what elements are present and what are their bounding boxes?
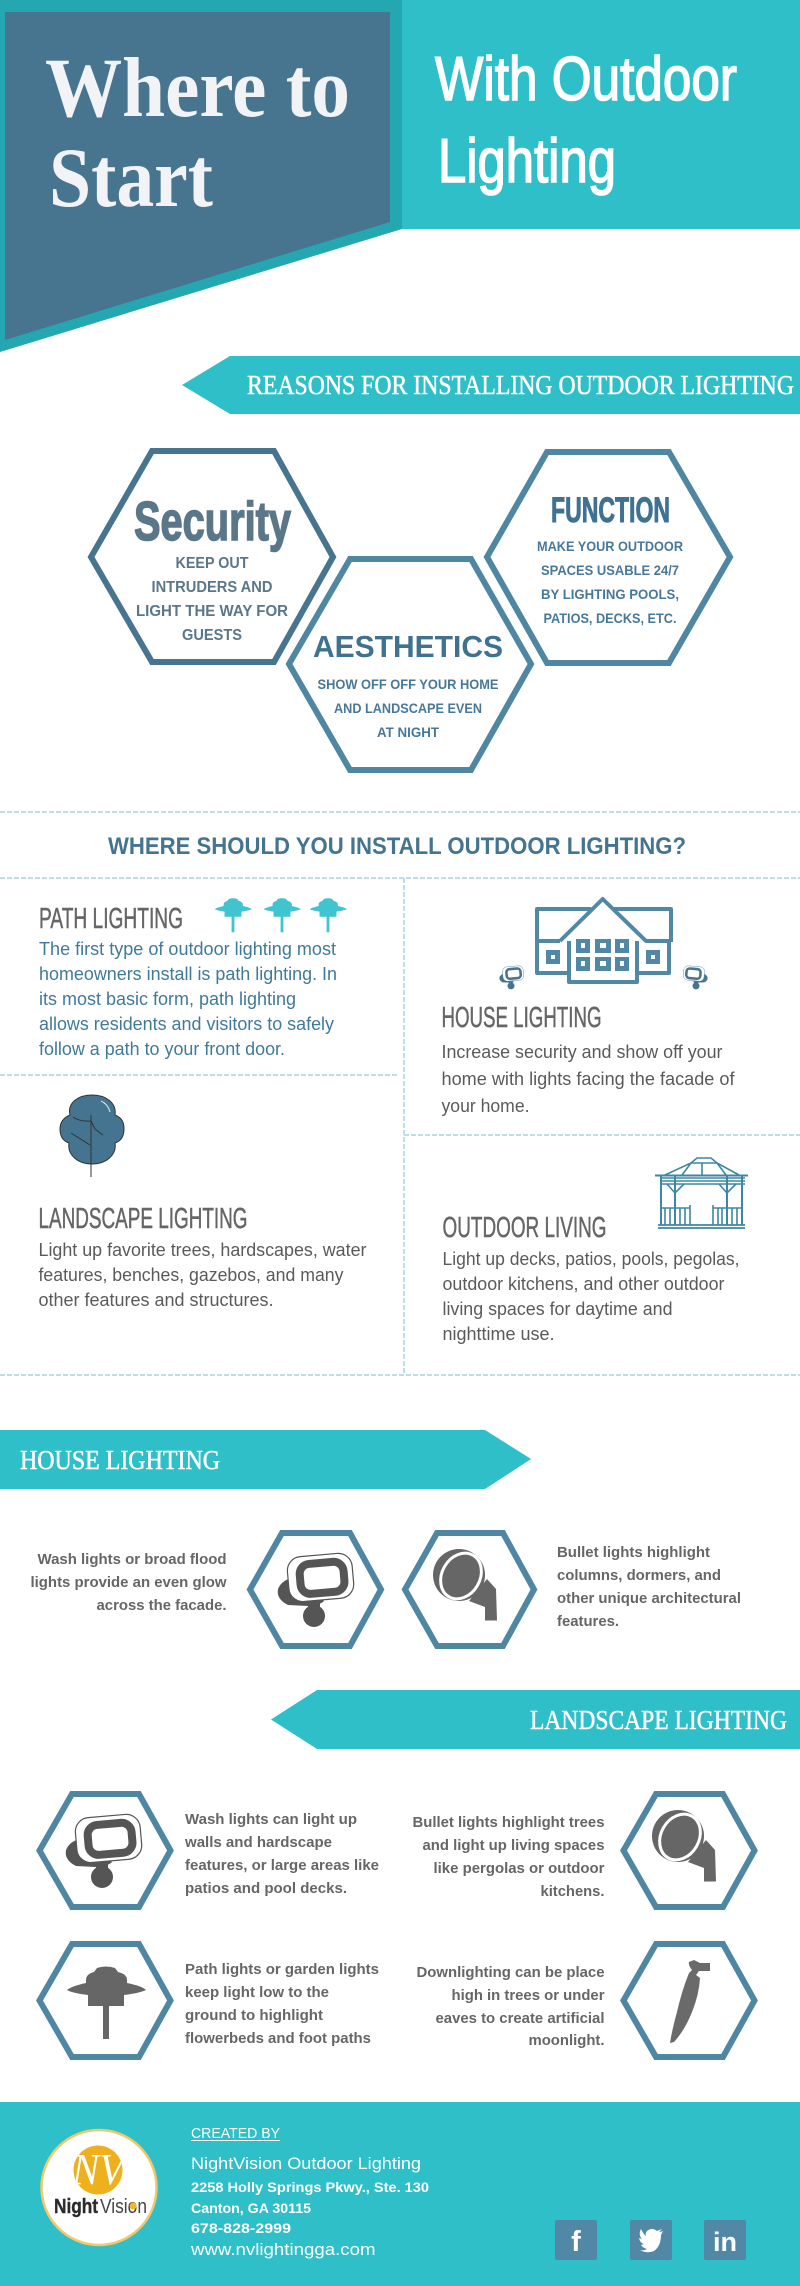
panel: house lighting: HOUSE LIGHTING — [442, 1002, 602, 1034]
panel: aesthetics hexagon: AESTHETICS — [313, 629, 503, 664]
panel: security hexagon: LIGHT THE WAY FOR — [136, 603, 288, 620]
contact details: www.nvlightingga.com — [190, 2240, 376, 2259]
text: path lights: ground to highlight — [185, 2007, 323, 2024]
text: wash lights (landscape): Wash lights can light up — [185, 1811, 357, 1828]
panel: landscape lighting: Light up favorite trees, hardscapes, water — [38, 1240, 366, 1260]
panel: aesthetics hexagon: AND LANDSCAPE EVEN — [334, 700, 482, 716]
panel: outdoor living: living spaces for daytime and — [442, 1299, 672, 1319]
panel: outdoor living: nighttime use. — [442, 1324, 554, 1344]
icon: tree — [60, 1095, 124, 1177]
text: bullet lights (house): other unique architectural — [557, 1590, 741, 1607]
panel: outdoor living: Light up decks, patios, pools, pegolas, — [442, 1249, 740, 1269]
title: Where to Start: Where to — [45, 41, 350, 135]
text: path lights — [185, 1961, 379, 2047]
icon: wash light hexagon (landscape) — [40, 1794, 170, 1907]
panel: function hexagon: FUNCTION — [551, 491, 670, 530]
panel: outdoor living — [442, 1158, 748, 1344]
text: bullet lights (landscape): and light up living spaces — [422, 1837, 604, 1854]
header band — [0, 0, 800, 352]
text: wash lights (house) — [30, 1551, 227, 1614]
text: bullet lights (house): Bullet lights highlight — [557, 1544, 710, 1561]
icon: facebook: f — [571, 2226, 581, 2258]
text: downlighting — [416, 1964, 605, 2049]
panel: security hexagon: KEEP OUT — [176, 555, 249, 572]
icon: twitter — [630, 2220, 672, 2260]
panel: security hexagon: INTRUDERS AND — [152, 579, 272, 596]
icon: bullet light hexagon (house) — [405, 1533, 534, 1646]
text: downlighting: Downlighting can be place — [416, 1964, 604, 1981]
panel: landscape lighting: features, benches, gazebos, and many — [38, 1265, 344, 1285]
panel: security hexagon: GUESTS — [182, 627, 242, 644]
panel: house lighting: home with lights facing the facade of — [442, 1069, 735, 1089]
subtitle: With Outdoor Lighting: With Outdoor — [435, 45, 737, 114]
text: bullet lights (house) — [557, 1544, 741, 1630]
text: path lights: Path lights or garden lights — [185, 1961, 379, 1978]
panel: function hexagon: MAKE YOUR OUTDOOR — [537, 538, 683, 554]
panel: function hexagon: PATIOS, DECKS, ETC. — [544, 610, 676, 626]
panel: path lighting: homeowners install is path lighting. In — [39, 964, 337, 984]
banner: house lighting: HOUSE LIGHTING — [20, 1445, 220, 1475]
icon: wash light hexagon (house) — [250, 1533, 381, 1646]
panel: security hexagon: Security — [134, 490, 291, 552]
text: wash lights (house): Wash lights or broad flood — [38, 1551, 226, 1568]
contact details: NightVision Outdoor Lighting — [191, 2154, 421, 2173]
heading: where should you install: WHERE SHOULD YOU INSTALL OUTDOOR LIGHTING? — [108, 833, 686, 860]
icon: left small wash light — [499, 965, 524, 989]
panel: function hexagon: BY LIGHTING POOLS, — [541, 586, 679, 602]
text: bullet lights (landscape): kitchens. — [540, 1883, 604, 1900]
text: wash lights (landscape): walls and hardscape — [184, 1834, 332, 1851]
icon: gazebo — [655, 1158, 748, 1228]
text: wash lights (house): lights provide an even glow — [30, 1574, 227, 1591]
text: downlighting: eaves to create artificial — [436, 2010, 604, 2027]
panel: function hexagon — [487, 452, 730, 663]
panel: aesthetics hexagon — [289, 559, 531, 770]
panel: aesthetics hexagon: SHOW OFF OFF YOUR HOME — [318, 676, 498, 692]
icon: three path lights — [215, 898, 347, 932]
logo: NightVision: NV — [71, 2145, 129, 2194]
panel: outdoor living: outdoor kitchens, and other outdoor — [442, 1274, 724, 1294]
icon: right small wash light — [683, 965, 708, 989]
contact details — [190, 2125, 429, 2259]
banner: reasons for installing outdoor lighting — [182, 356, 800, 414]
text: path lights: keep light low to the — [185, 1984, 329, 2001]
footer — [0, 2102, 800, 2286]
panel: path lighting — [39, 898, 347, 1059]
title: Where to Start — [45, 41, 350, 225]
text: wash lights (landscape): features, or large areas like — [185, 1857, 379, 1874]
panel: house lighting — [442, 899, 735, 1116]
panel: house lighting: Increase security and show off your — [442, 1042, 722, 1062]
panel: landscape lighting — [38, 1095, 366, 1310]
text: wash lights (landscape): patios and pool decks. — [185, 1880, 347, 1897]
text: bullet lights (landscape): Bullet lights highlight trees — [412, 1814, 604, 1831]
contact details: 2258 Holly Springs Pkwy., Ste. 130 — [191, 2179, 429, 2195]
subtitle: With Outdoor Lighting — [435, 45, 737, 196]
text: wash lights (landscape) — [184, 1811, 379, 1897]
text: wash lights (house): across the facade. — [96, 1597, 226, 1614]
banner: landscape lighting — [271, 1690, 800, 1749]
icon: house — [537, 899, 671, 982]
text: downlighting: moonlight. — [528, 2032, 604, 2049]
panel: path lighting: follow a path to your front door. — [39, 1039, 285, 1059]
banner: house lighting — [0, 1430, 531, 1489]
panel: landscape lighting: other features and structures. — [38, 1290, 274, 1310]
panel: landscape lighting: LANDSCAPE LIGHTING — [38, 1203, 248, 1235]
panel: house lighting: your home. — [442, 1096, 530, 1116]
logo: NightVision — [42, 2130, 156, 2245]
icon: linkedin: in — [713, 2227, 737, 2257]
icon: bullet light hexagon (landscape) — [624, 1794, 754, 1907]
title: Where to Start: Start — [49, 131, 213, 225]
text: downlighting: high in trees or under — [452, 1987, 605, 2004]
icon: facebook — [555, 2220, 597, 2260]
panel: aesthetics hexagon: AT NIGHT — [377, 724, 439, 740]
text: bullet lights (landscape) — [412, 1814, 605, 1900]
panel: path lighting: its most basic form, path lighting — [39, 989, 296, 1009]
panel: security hexagon — [91, 451, 333, 662]
text: bullet lights (house): features. — [557, 1613, 619, 1630]
panel: function hexagon: SPACES USABLE 24/7 — [541, 562, 679, 578]
panel: path lighting: PATH LIGHTING — [39, 903, 183, 935]
text: bullet lights (landscape): like pergolas or outdoor — [434, 1860, 605, 1877]
text: bullet lights (house): columns, dormers, and — [557, 1567, 721, 1584]
icon: downlight hexagon — [624, 1944, 754, 2057]
logo: NightVision: Vision — [100, 2196, 147, 2218]
contact details: Canton, GA 30115 — [191, 2200, 311, 2216]
panel: path lighting: The first type of outdoor lighting most — [39, 939, 336, 959]
contact details: 678-828-2999 — [191, 2220, 291, 2236]
text: path lights: flowerbeds and foot paths — [185, 2030, 371, 2047]
panel: outdoor living: OUTDOOR LIVING — [442, 1212, 606, 1244]
contact details: CREATED BY — [191, 2125, 280, 2142]
icon: linkedin — [704, 2220, 746, 2260]
panel: path lighting: allows residents and visitors to safely — [39, 1014, 334, 1034]
subtitle: With Outdoor Lighting: Lighting — [438, 127, 616, 196]
logo: NightVision: Night — [54, 2196, 98, 2218]
icon: path light hexagon — [40, 1944, 170, 2057]
